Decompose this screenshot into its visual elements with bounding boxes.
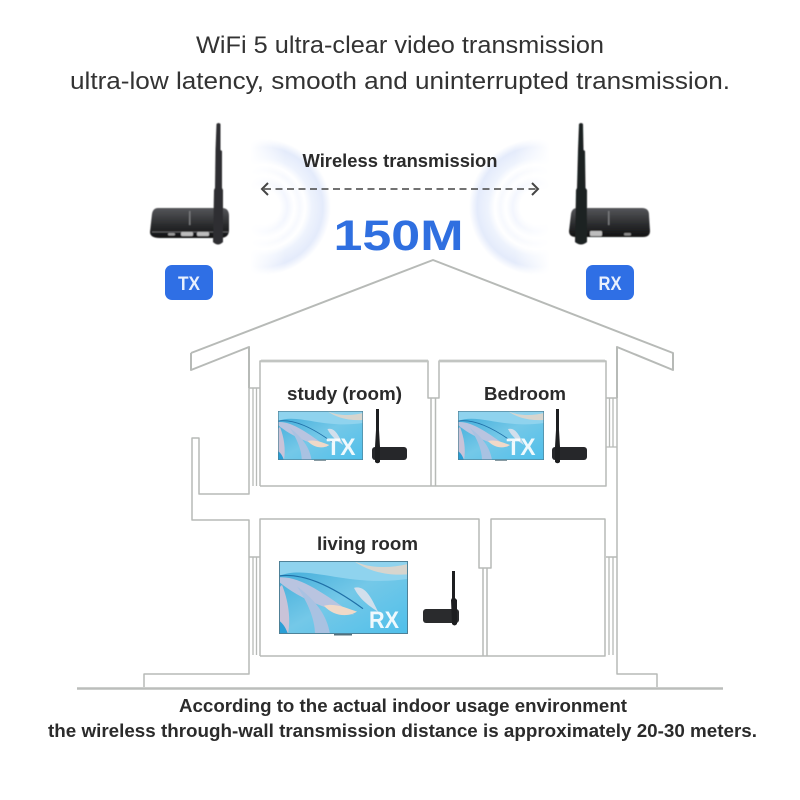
arrow: bidirectional dashed	[262, 183, 538, 195]
ground line	[77, 687, 723, 690]
TV with TX: TX	[326, 434, 356, 461]
device: TX transmitter	[150, 123, 229, 244]
TV with RX	[279, 561, 408, 636]
room: living room	[279, 534, 459, 636]
house floor plan	[77, 260, 723, 688]
label: wireless transmission: Wireless transmission	[302, 151, 498, 171]
interior partition upper	[431, 398, 436, 486]
title: ultra-low latency, smooth and uninterrupted transmission.	[70, 68, 730, 95]
signal waves: left	[261, 144, 328, 270]
label: living room: living room	[317, 534, 418, 554]
badge: TX	[165, 265, 213, 300]
mini device	[372, 409, 407, 463]
label: study (room): study (room)	[287, 384, 402, 404]
room: bedroom	[458, 384, 587, 463]
mini device	[423, 571, 459, 626]
mini device	[552, 409, 587, 463]
footer note	[48, 696, 757, 741]
badge: RX: RX	[598, 274, 622, 295]
footer note: the wireless through-wall transmission distance is approximately 20-30 meters.	[48, 721, 757, 741]
distance: 150M: 150M	[334, 212, 464, 260]
device: RX receiver	[569, 123, 650, 244]
roof	[191, 260, 673, 398]
title: WiFi 5 ultra-clear video transmission	[196, 32, 604, 59]
badge: RX	[586, 265, 634, 300]
TV with TX: TX	[506, 434, 536, 461]
title	[70, 32, 730, 95]
badge: TX: TX	[178, 274, 200, 295]
room outlines: lower floor	[260, 519, 605, 656]
TV with RX: RX	[369, 607, 399, 634]
signal waves: right	[472, 144, 539, 270]
label: Bedroom: Bedroom	[484, 384, 566, 404]
interior partition lower	[483, 568, 487, 656]
room outlines: upper floor	[260, 361, 606, 486]
outer walls	[144, 388, 657, 687]
footer note: According to the actual indoor usage environment	[179, 696, 627, 716]
room: study	[278, 384, 407, 463]
windows	[253, 388, 617, 655]
